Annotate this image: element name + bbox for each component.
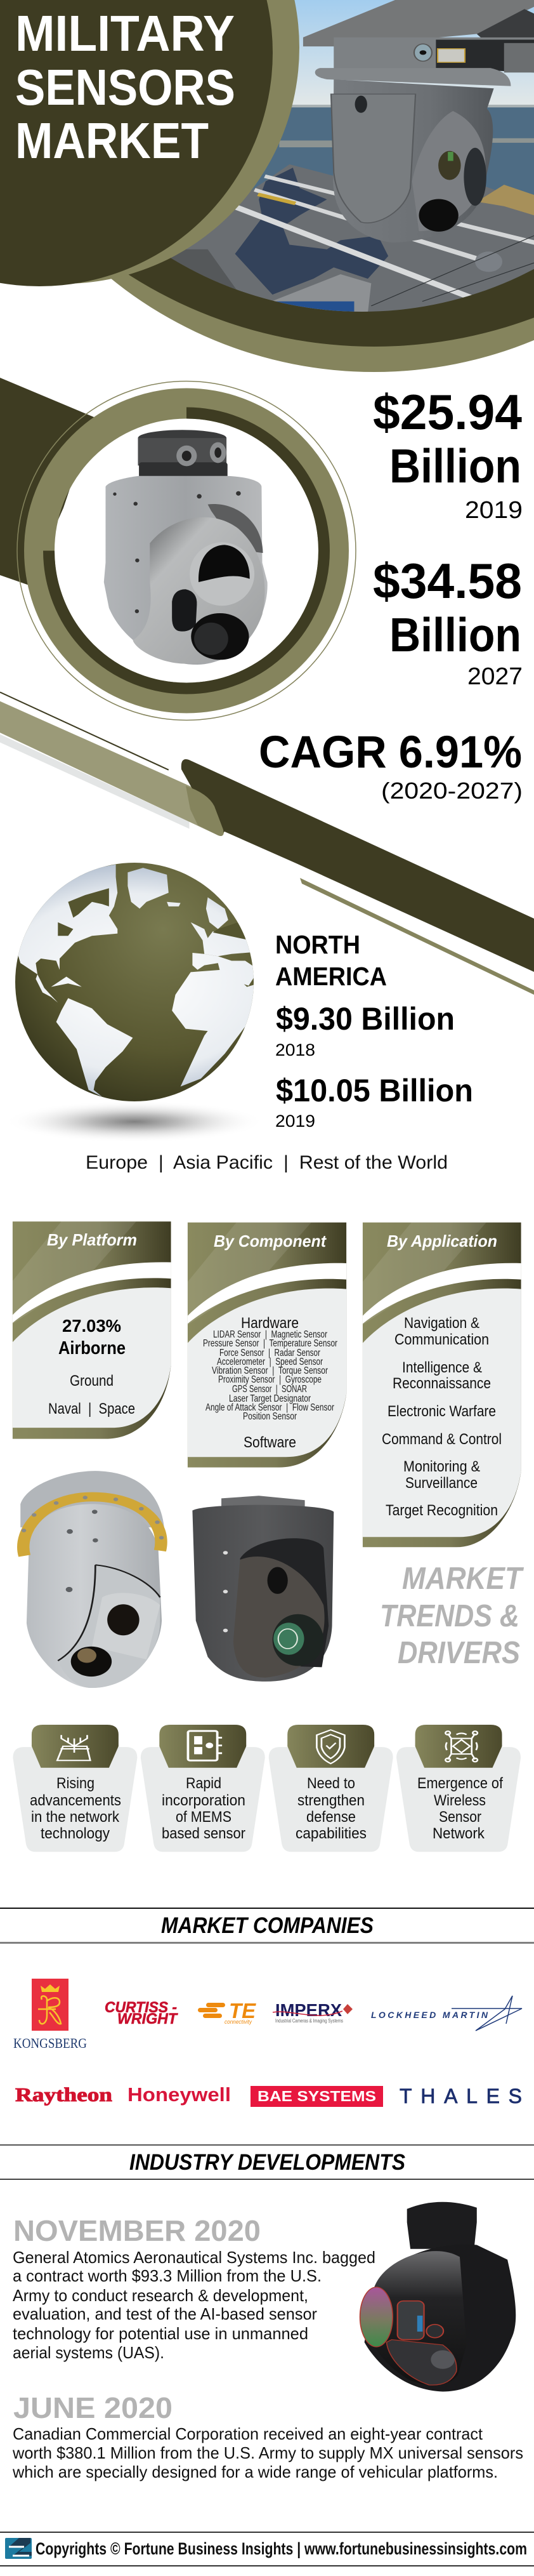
hero: outer olive arc	[0, 0, 534, 372]
dark diagonal band lower right	[181, 759, 534, 972]
logo: Imperx: IMPERX	[275, 2000, 342, 2020]
region: North America: $10.05 Billion	[276, 1073, 473, 1108]
heading: industry developments: INDUSTRY DEVELOPMENTS	[129, 2150, 405, 2175]
dark diagonal band behind ring	[0, 378, 94, 585]
development: June 2020: which are specially designed for a wide range of vehicular platforms.	[12, 2462, 498, 2481]
driver card: wireless sensor network	[396, 1725, 521, 1852]
driver card: defense capabilities: defense	[306, 1809, 356, 1826]
heading: market trends and drivers: DRIVERS	[398, 1636, 520, 1670]
heading: market companies	[0, 1908, 534, 1944]
panel: by application: Navigation &	[404, 1315, 479, 1332]
driver card: defense capabilities: capabilities	[296, 1825, 367, 1842]
driver card: wireless sensor network: Sensor	[439, 1809, 481, 1826]
globe shadow	[4, 1101, 264, 1143]
panel: by application: Communication	[394, 1331, 489, 1348]
logo: TE Connectivity: TE	[229, 1999, 256, 2022]
logo: Thales: THALES	[400, 2085, 522, 2108]
development: November 2020: evaluation, and test of the AI-based sensor	[13, 2304, 317, 2323]
panel: by application: Surveillance	[405, 1475, 478, 1492]
heading: market companies: MARKET COMPANIES	[161, 1913, 374, 1938]
stat: 2019 market value: $25.94	[373, 384, 522, 440]
development: November 2020: Army to conduct research & development,	[13, 2286, 308, 2305]
development: November 2020: technology for potential use in unmanned	[13, 2324, 308, 2343]
stat: 2019 market value: 2019	[465, 497, 523, 524]
region: North America: AMERICA	[275, 962, 387, 991]
panel: by component: Angle of Attack Sensor | Flow Sensor	[205, 1402, 335, 1413]
hero: olive crescent	[0, 0, 299, 284]
region: North America: NORTH	[275, 930, 360, 959]
logo: TE Connectivity: connectivity	[225, 2019, 252, 2025]
panel: by application: By Application	[387, 1232, 497, 1251]
panel: by component: LIDAR Sensor | Magnetic Sensor	[213, 1329, 327, 1340]
stat: CAGR: (2020-2027)	[381, 778, 523, 804]
driver card: network technology: technology	[41, 1825, 110, 1842]
panel: by application: Electronic Warfare	[387, 1403, 496, 1420]
stat: CAGR	[259, 727, 523, 804]
heading: market trends and drivers: MARKET	[402, 1562, 524, 1596]
development: June 2020: Canadian Commercial Corporation received an eight-year contract	[13, 2424, 483, 2443]
panel: by component: Laser Target Designator	[229, 1393, 311, 1404]
driver card: MEMS sensor	[141, 1725, 265, 1852]
driver card: network technology: Rising	[56, 1775, 94, 1792]
panel: by application: Monitoring &	[403, 1458, 480, 1475]
panel: by platform: 27.03%	[62, 1316, 121, 1336]
region: North America: 2019	[275, 1112, 315, 1131]
driver card: MEMS sensor: Rapid	[186, 1775, 221, 1792]
hero: dark title circle	[0, 0, 273, 286]
logo: Kongsberg: KONGSBERG	[13, 2035, 87, 2051]
stat: 2019 market value: Billion	[389, 439, 521, 493]
logo: Lockheed Martin: LOCKHEED MARTIN	[371, 2010, 488, 2020]
region: North America	[275, 930, 473, 1131]
driver card: defense capabilities	[269, 1725, 393, 1852]
panel: by component: Pressure Sensor | Temperature Sensor	[203, 1338, 337, 1349]
globe	[13, 863, 259, 1101]
stat: 2027 market value: $34.58	[373, 553, 522, 609]
panel: by application: Reconnaissance	[393, 1375, 491, 1392]
driver card: MEMS sensor: of MEMS	[176, 1809, 231, 1826]
panel: by component	[188, 1223, 346, 1468]
driver card: MEMS sensor: based sensor	[162, 1825, 245, 1842]
heading: market trends and drivers	[380, 1562, 524, 1670]
panel: by component: Force Sensor | Radar Sensor	[219, 1348, 320, 1358]
logo: Lockheed Martin	[371, 1996, 522, 2031]
panel: by application: Target Recognition	[386, 1502, 498, 1519]
stat: 2027 market value	[373, 553, 523, 690]
panel: by application	[363, 1223, 521, 1547]
panel: by component: Vibration Sensor | Torque Sensor	[212, 1365, 328, 1376]
driver card: defense capabilities: Need to	[307, 1775, 355, 1792]
panel: by application: Command & Control	[382, 1431, 502, 1448]
sensor image: gray gimbal	[104, 430, 268, 665]
driver card: wireless sensor network: Network	[433, 1825, 485, 1842]
band overlap tint	[186, 786, 223, 836]
sensor image: dark gray	[192, 1496, 334, 1682]
driver card: network technology: in the network	[31, 1809, 120, 1826]
development: November 2020: a contract worth $93.3 Million from the U.S.	[13, 2266, 322, 2285]
panel: by component: Position Sensor	[243, 1411, 297, 1422]
panel: by component: Hardware	[241, 1315, 299, 1332]
logo: Curtiss-Wright: WRIGHT	[117, 2010, 178, 2028]
other regions: Europe | Asia Pacific | Rest of the World	[86, 1152, 448, 1173]
panel: by platform: By Platform	[47, 1230, 137, 1249]
development: November 2020: NOVEMBER 2020	[13, 2214, 261, 2247]
panel: by component: Proximity Sensor | Gyroscope	[218, 1374, 322, 1385]
title	[15, 5, 235, 169]
logo: Curtiss-Wright	[105, 1999, 178, 2028]
title: MARKET	[15, 112, 209, 169]
stat: 2027 market value: Billion	[389, 608, 521, 661]
sensor image: black gimbal	[360, 2202, 516, 2392]
panel: by platform: Naval | Space	[48, 1400, 135, 1417]
footer	[0, 2532, 534, 2566]
panel: by component: Software	[244, 1434, 296, 1451]
panel: by component: GPS Sensor | SONAR	[232, 1384, 307, 1395]
logo: Honeywell: Honeywell	[127, 2083, 231, 2106]
logo: Kongsberg	[13, 1979, 87, 2051]
stat: CAGR: CAGR 6.91%	[259, 727, 522, 778]
stat: 2027 market value: 2027	[467, 663, 523, 690]
development: November 2020	[13, 2214, 375, 2362]
stat: 2019 market value	[373, 384, 523, 524]
sensor image: light gray with yellow ring	[20, 1471, 164, 1688]
region: North America: $9.30 Billion	[276, 1001, 455, 1037]
driver card: MEMS sensor: incorporation	[162, 1792, 245, 1809]
panel: by application: Intelligence &	[402, 1359, 482, 1376]
heading: market trends and drivers: TRENDS &	[380, 1599, 519, 1633]
panel: by platform	[13, 1221, 171, 1439]
development: June 2020: worth $380.1 Million from the U.S. Army to supply MX universal sensors	[12, 2443, 523, 2462]
region: North America: 2018	[275, 1040, 315, 1059]
title: MILITARY	[15, 5, 235, 62]
logo: TE Connectivity	[198, 1999, 256, 2025]
development: June 2020	[12, 2391, 523, 2481]
logo: Raytheon: Raytheon	[15, 2083, 112, 2106]
driver card: defense capabilities: strengthen	[297, 1792, 365, 1809]
panel: by platform: Ground	[70, 1372, 114, 1390]
logo: Imperx: Industrial Cameras & Imaging Systems	[275, 2018, 343, 2024]
diagonal decorative bands	[0, 692, 224, 836]
logo: Curtiss-Wright: CURTISS -	[105, 1999, 177, 2016]
title: SENSORS	[15, 59, 235, 116]
thin olive diagonal	[300, 878, 534, 995]
hero photo: sensor on ship deck	[166, 0, 534, 340]
driver card: wireless sensor network: Emergence of	[417, 1775, 503, 1792]
development: November 2020: aerial systems (UAS).	[13, 2343, 164, 2362]
logo: BAE Systems: BAE SYSTEMS	[257, 2088, 376, 2104]
driver card: network technology	[13, 1725, 137, 1852]
logo: BAE Systems	[251, 2086, 383, 2107]
ring around sensor	[17, 381, 356, 720]
driver card: network technology: advancements	[30, 1792, 121, 1809]
development: November 2020: General Atomics Aeronautical Systems Inc. bagged	[13, 2248, 375, 2267]
driver card: wireless sensor network: Wireless	[434, 1792, 486, 1809]
development: June 2020: JUNE 2020	[13, 2391, 173, 2424]
panel: by platform: Airborne	[58, 1338, 126, 1358]
hero: dark arc	[0, 0, 534, 347]
panel: by component: By Component	[214, 1232, 327, 1251]
panel: by component: Accelerometer | Speed Sensor	[217, 1357, 323, 1367]
